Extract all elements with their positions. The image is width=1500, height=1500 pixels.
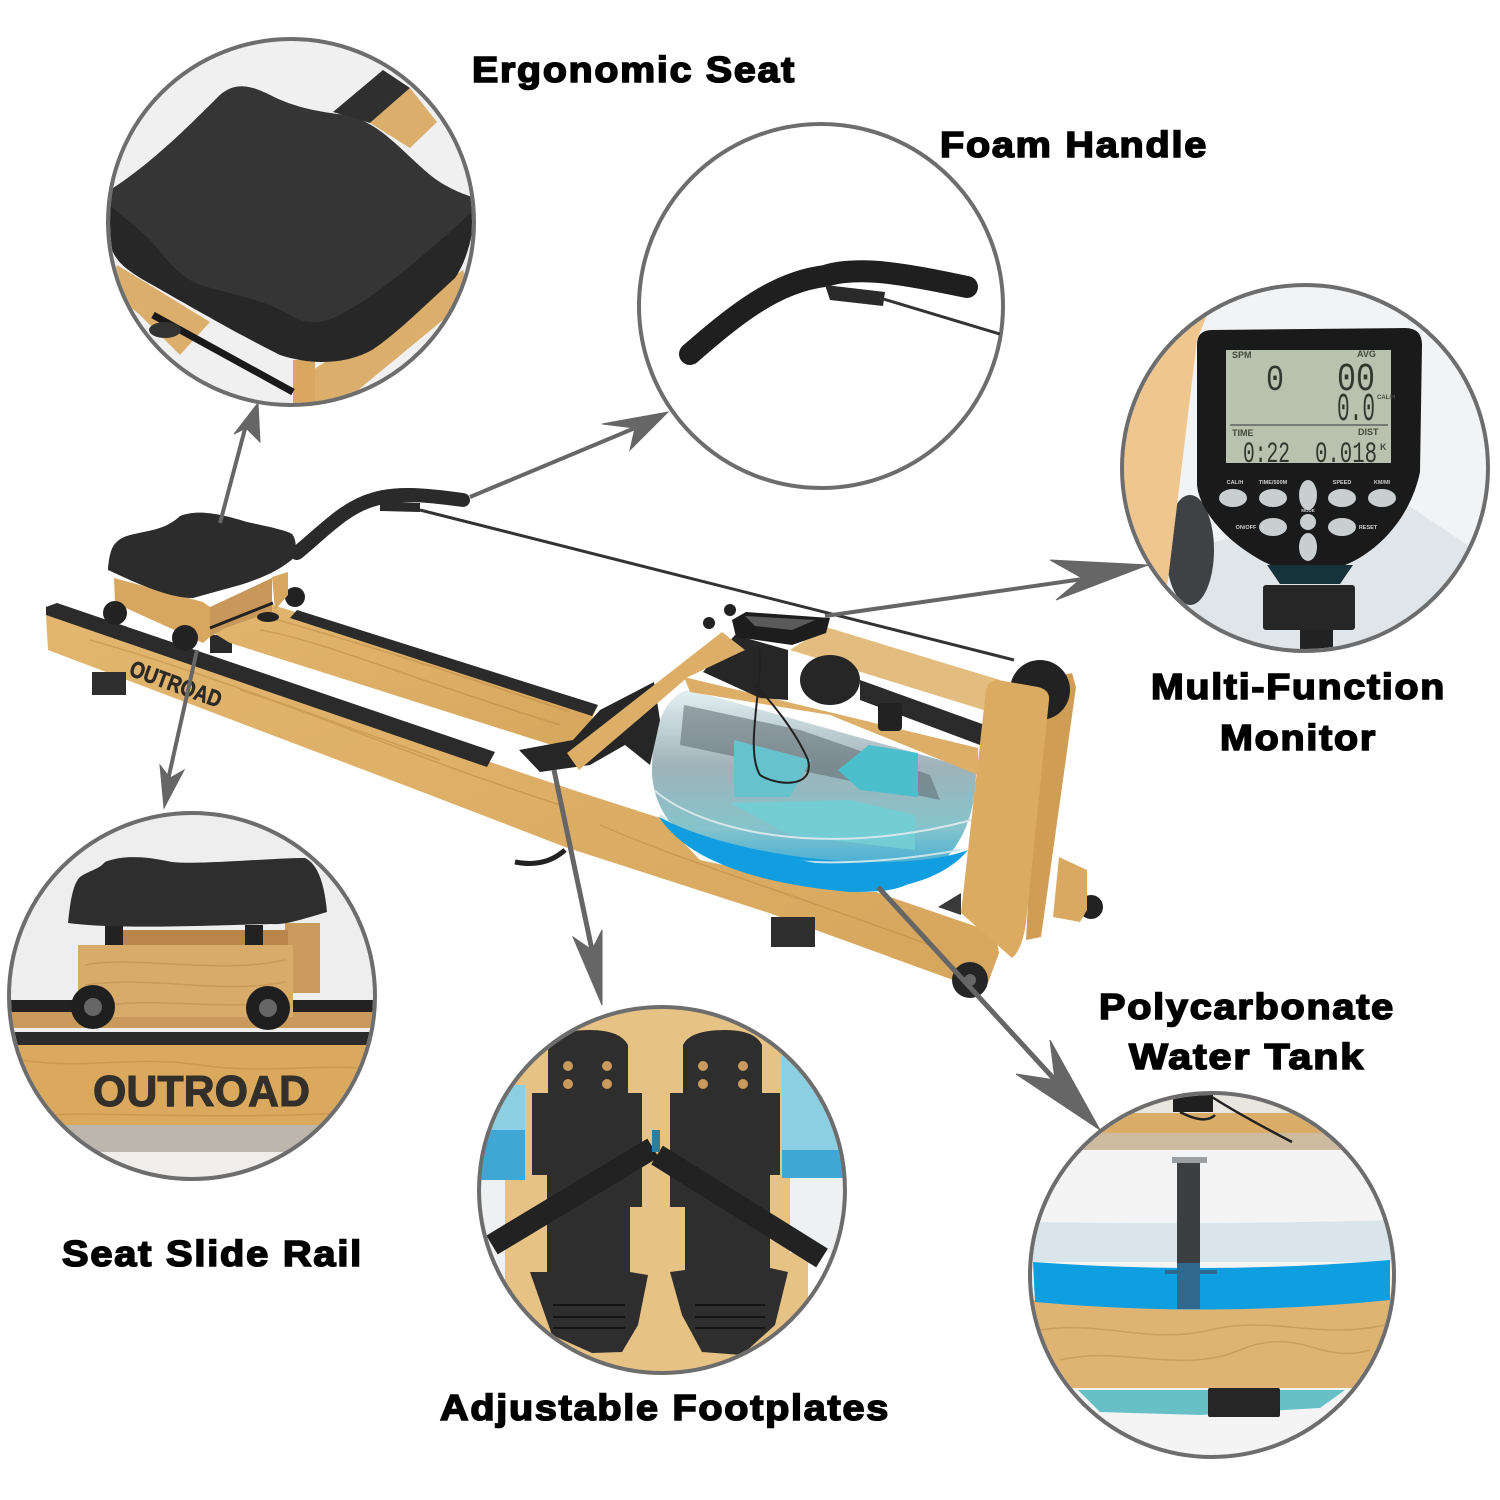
lower paddle reflection — [730, 800, 915, 850]
rear wheel of frame — [1079, 895, 1103, 919]
button labels: RESET — [1359, 525, 1378, 531]
cushion — [107, 86, 474, 362]
logo: OUTROAD — [93, 1067, 310, 1116]
heading: Ergonomic Seat: Ergonomic Seat — [472, 49, 796, 90]
arrow: tank — [878, 887, 1100, 1130]
upright post — [961, 680, 1049, 958]
top pulley — [1010, 660, 1070, 720]
seat top — [68, 857, 327, 927]
rail behind seat — [333, 70, 410, 123]
front beam — [0, 1045, 380, 1125]
button labels: MODE — [1301, 508, 1315, 513]
button labels: CAL/H — [1227, 480, 1243, 486]
dark disc — [1166, 495, 1214, 605]
monitor cable — [754, 650, 809, 783]
monitor knobs — [703, 604, 736, 629]
frame left — [110, 265, 210, 355]
logo: OUTROAD — [126, 655, 225, 713]
lcd readings: 0.018 — [1315, 438, 1377, 472]
pulley flywheel — [800, 655, 860, 705]
lcd readings: DIST — [1358, 427, 1379, 437]
panel: polycarbonate water tank — [1030, 1093, 1395, 1457]
water tank — [652, 690, 976, 892]
heading: Foam Handle: Foam Handle — [940, 124, 1208, 165]
teal base — [1078, 1390, 1345, 1415]
foot ridges — [553, 1305, 765, 1328]
cable — [420, 510, 1014, 660]
monitor screen — [745, 616, 815, 630]
heading: Polycarbonate Water Tank: Water Tank — [1129, 1036, 1365, 1077]
rear post — [1026, 673, 1076, 940]
water band — [1033, 1260, 1390, 1310]
heading: Adjustable Footplates: Adjustable Footplates — [440, 1387, 890, 1428]
panel: monitor — [1120, 285, 1490, 660]
button labels: KM/MI — [1374, 480, 1391, 486]
top metal strip — [1030, 1095, 1395, 1113]
monitor on machine — [732, 612, 830, 645]
heading: Multi-Function Monitor: Multi-Function — [1151, 666, 1446, 707]
diagonal wood brace — [567, 632, 745, 770]
rear foot pad under seat — [210, 635, 232, 653]
heading: Polycarbonate Water Tank — [1099, 986, 1395, 1077]
centre clip — [652, 1130, 660, 1152]
cushion top surface — [110, 86, 472, 322]
rowing machine — [46, 495, 1103, 998]
tank front over beam — [659, 817, 915, 892]
panel: foam handle — [639, 124, 1003, 488]
seat rear plate — [272, 572, 288, 610]
side backgrounds — [492, 1085, 525, 1130]
right footplate — [670, 1030, 788, 1355]
button labels: TIME/500M — [1259, 480, 1288, 486]
dark bar behind tank — [860, 680, 985, 745]
arrow: monitor — [825, 560, 1148, 616]
lcd readings: 00 — [1337, 358, 1375, 403]
front rail — [46, 603, 495, 767]
shaft flanges — [1172, 1157, 1207, 1163]
lcd readings: SPM — [1232, 350, 1252, 360]
panel: adjustable footplates — [479, 1007, 858, 1373]
lcd readings: AVG — [1357, 349, 1376, 359]
rear foot beam — [1053, 857, 1087, 922]
handle bracket — [380, 501, 420, 512]
small pulley — [878, 703, 902, 731]
glass band — [1030, 1220, 1395, 1262]
button labels: SPEED — [1333, 480, 1351, 486]
right paddle — [838, 745, 918, 797]
panel: ergonomic seat — [107, 39, 474, 406]
water band — [659, 817, 968, 890]
arrow: seat — [220, 403, 260, 523]
heading: Polycarbonate Water Tank: Polycarbonate — [1099, 986, 1395, 1027]
top wood bar — [790, 627, 1000, 712]
cable — [1180, 1097, 1292, 1142]
front rail — [0, 1032, 380, 1045]
lower background — [1186, 506, 1468, 649]
rear rail beam — [212, 595, 598, 753]
left footplate — [530, 1030, 648, 1353]
floor reflection — [65, 1125, 318, 1152]
button labels — [1227, 480, 1391, 531]
heading: Multi-Function Monitor: Monitor — [1220, 717, 1377, 758]
upper rail and beam — [0, 1000, 380, 1012]
seat wheels — [103, 601, 279, 651]
adjuster holes — [563, 1061, 748, 1089]
arrow: rail — [160, 650, 197, 808]
rear plate — [285, 923, 320, 993]
front foot pad — [92, 672, 126, 695]
wood lower — [1030, 1300, 1395, 1388]
handle bracket — [825, 285, 885, 306]
wheels — [71, 985, 290, 1030]
lcd readings: 0.0 — [1337, 388, 1375, 433]
monitor mount — [1267, 565, 1353, 584]
black bracket — [703, 635, 788, 700]
lower wood bar — [684, 677, 978, 775]
lcd readings: 0:22 — [1243, 438, 1290, 472]
footplate bracket — [519, 682, 660, 772]
foot pad — [1208, 1388, 1280, 1417]
main front beam — [46, 615, 999, 983]
paddle shaft — [1177, 1163, 1200, 1263]
frame right — [313, 270, 470, 405]
handle — [297, 495, 463, 553]
monitor body — [1197, 328, 1422, 573]
rod — [153, 315, 293, 392]
straps — [492, 1148, 822, 1258]
rear rail — [290, 610, 598, 716]
loose strap — [515, 850, 565, 864]
top wood — [1030, 1113, 1395, 1133]
seat block — [78, 945, 293, 1017]
heading: Seat Slide Rail: Seat Slide Rail — [62, 1233, 363, 1274]
wood post — [1124, 316, 1206, 585]
monitor buttons — [1219, 480, 1396, 561]
panel: seat slide rail — [0, 813, 380, 1182]
lcd readings: TIME — [1232, 428, 1254, 438]
lcd readings: CAL/H — [1377, 395, 1395, 401]
seat rear wheel — [285, 587, 305, 607]
arrow: footplates — [554, 770, 602, 1005]
left paddle — [734, 740, 811, 797]
seat cushion — [108, 513, 296, 598]
lcd readings — [1232, 349, 1395, 472]
seat interior wood — [210, 578, 272, 637]
handle grip — [690, 271, 967, 354]
mid foot pad — [771, 917, 815, 947]
lcd screen — [1226, 350, 1391, 463]
lcd readings: 0 — [1266, 360, 1284, 401]
top black part — [1173, 1095, 1213, 1112]
arrow: handle — [470, 412, 668, 497]
button labels: ON/OFF — [1236, 525, 1257, 531]
rail crossbar — [210, 603, 273, 628]
seat front block — [114, 578, 210, 643]
cable — [880, 298, 1003, 335]
lcd readings: K — [1380, 442, 1387, 452]
posts — [105, 926, 123, 945]
under beam shadow — [938, 893, 961, 915]
front wheel — [952, 962, 988, 998]
heading: Multi-Function Monitor — [1151, 666, 1446, 758]
